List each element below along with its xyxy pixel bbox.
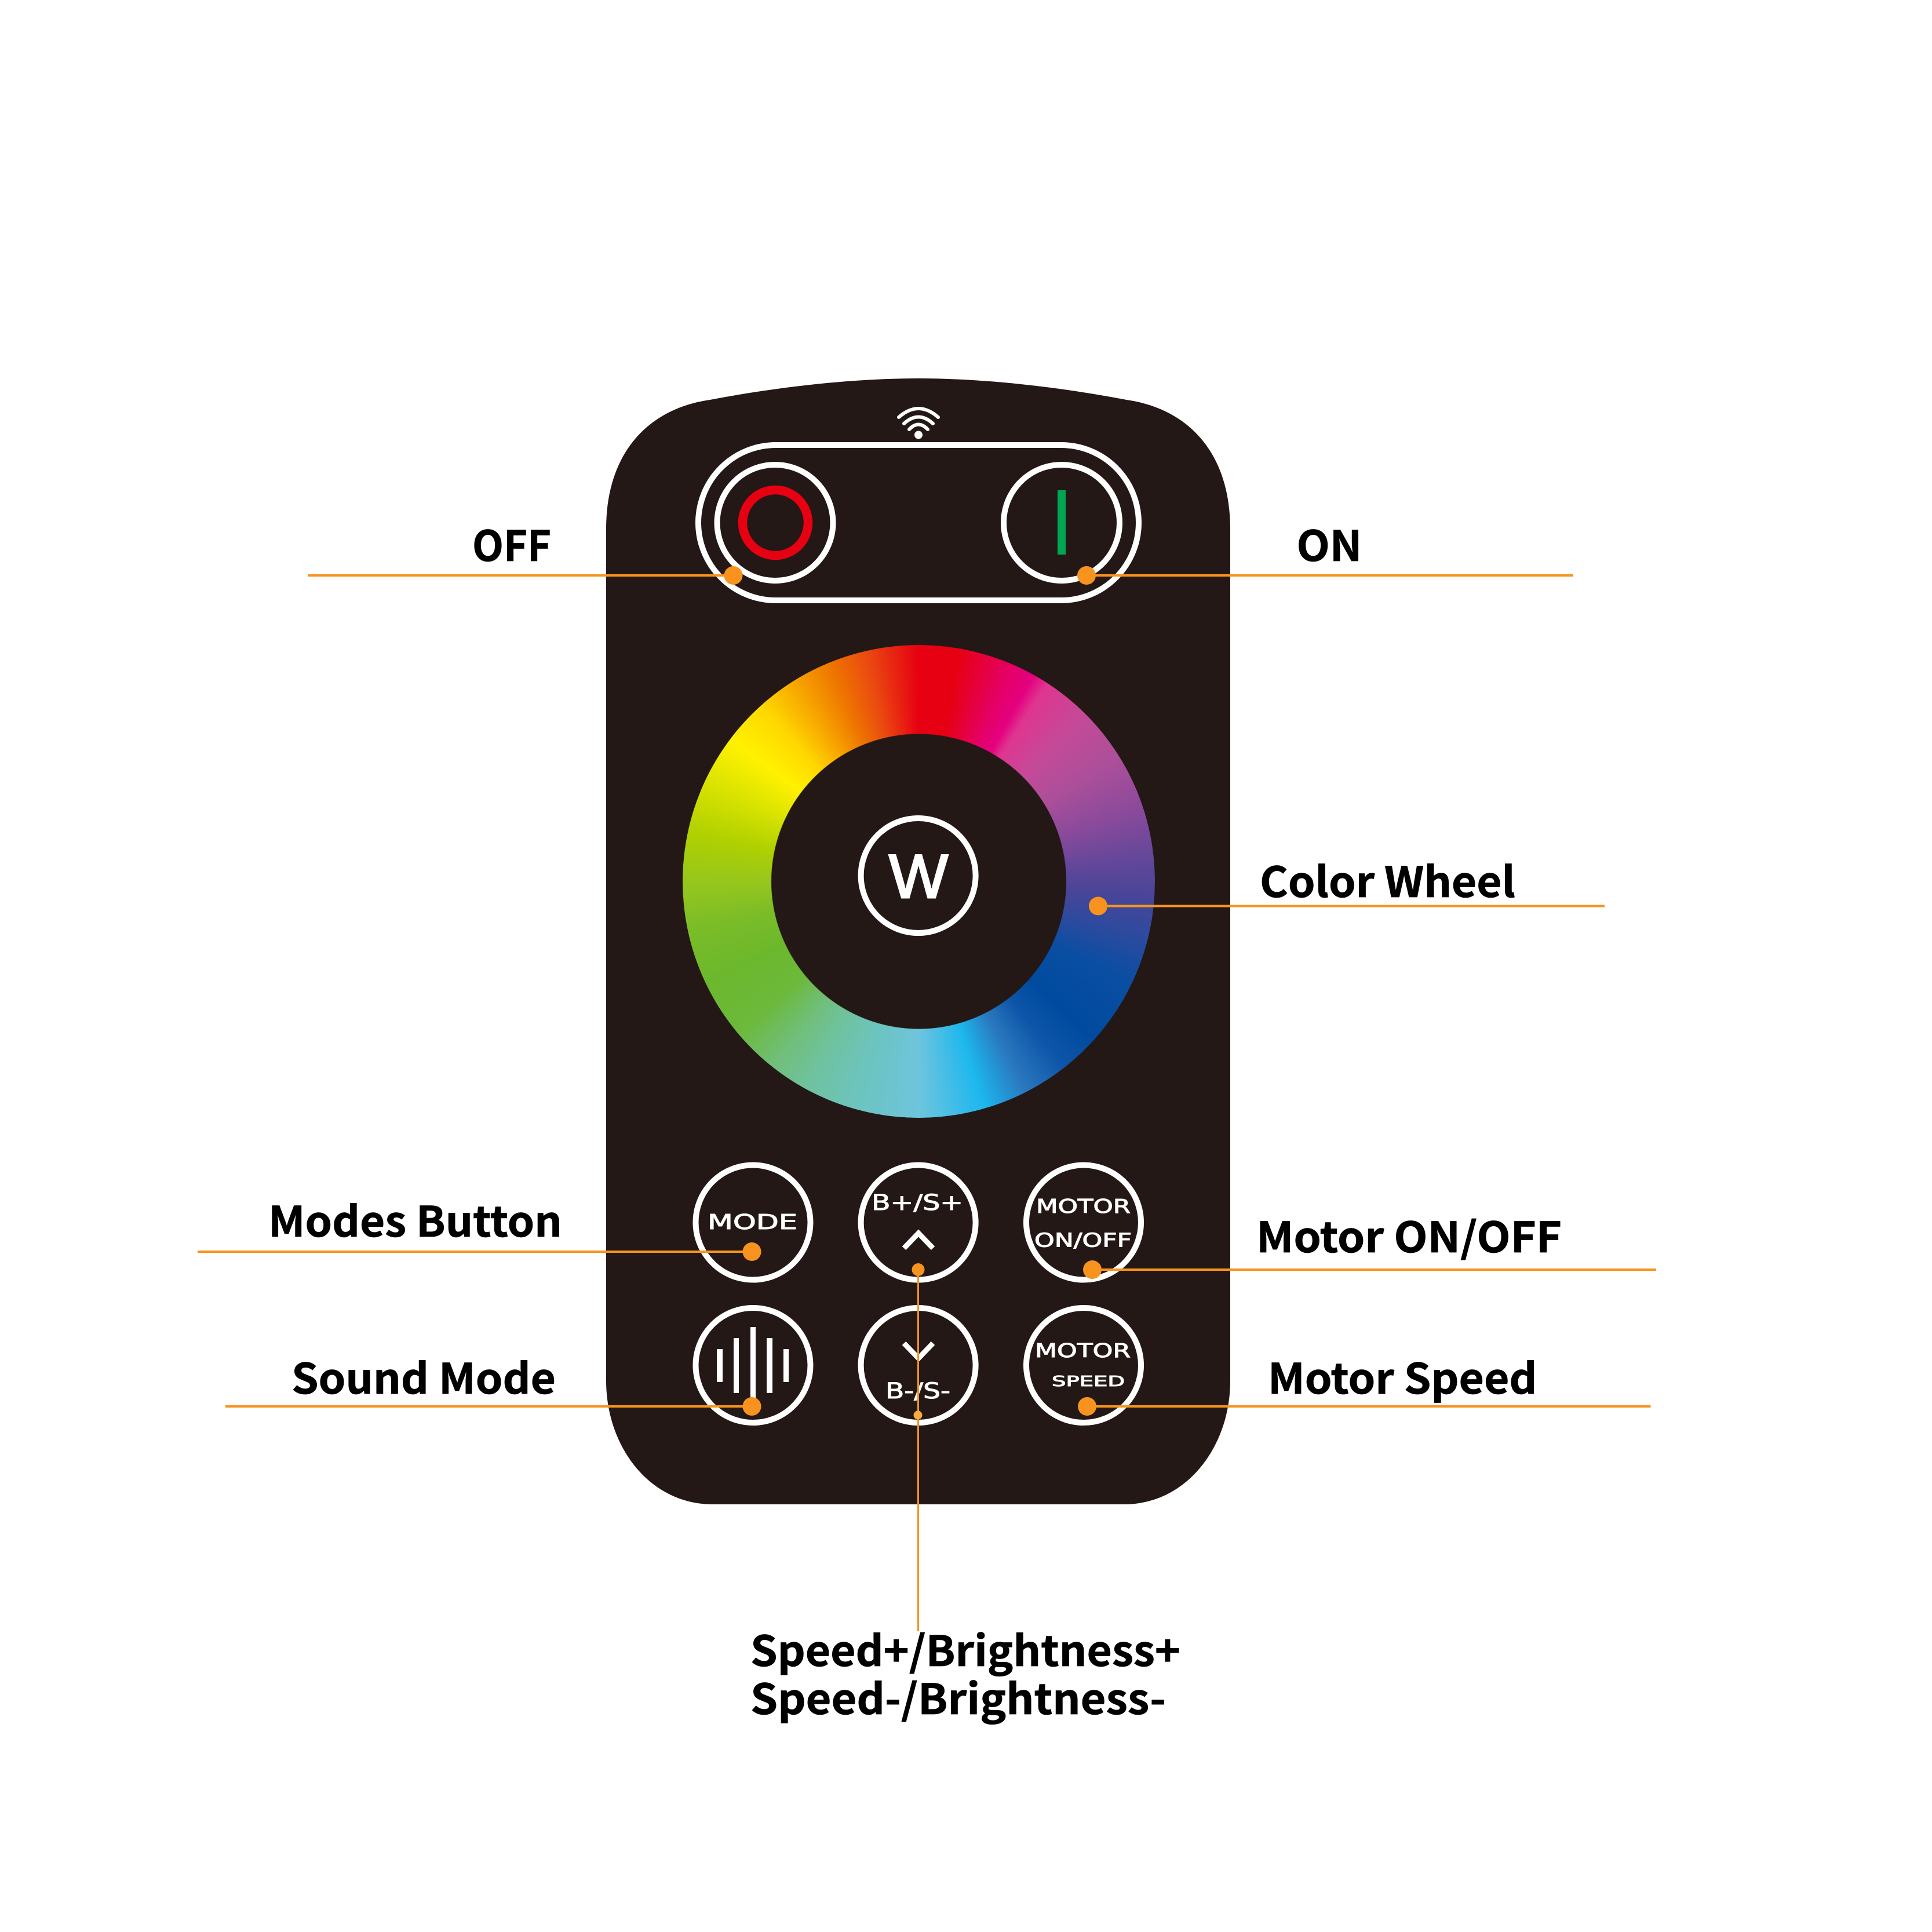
callout: Sound Mode bbox=[225, 1345, 761, 1416]
brightness and speed up button: B+/S+ bbox=[872, 1190, 963, 1215]
brightness and speed down button: B-/S- bbox=[885, 1379, 950, 1404]
MODE button: MODE bbox=[708, 1211, 797, 1234]
ON button bbox=[1004, 465, 1120, 581]
callout: Sound Mode: Sound Mode bbox=[291, 1345, 556, 1406]
icon: wireless signal bbox=[899, 409, 938, 439]
callout: Color Wheel: Color Wheel bbox=[1260, 848, 1515, 909]
remote control device bbox=[606, 378, 1230, 1504]
callout: Modes Button bbox=[198, 1188, 761, 1261]
callout: ON bbox=[1077, 512, 1573, 585]
callout: Color Wheel bbox=[1089, 848, 1605, 916]
callout: Motor Speed bbox=[1078, 1345, 1650, 1416]
motor speed button: SPEED bbox=[1052, 1373, 1125, 1390]
callout: ON: ON bbox=[1297, 512, 1362, 573]
callout: OFF: OFF bbox=[472, 512, 551, 573]
callout: Modes Button: Modes Button bbox=[268, 1188, 562, 1249]
callout: Speed and Brightness bbox=[750, 1263, 1180, 1726]
callout: Motor ON/OFF: Motor ON/OFF bbox=[1256, 1204, 1562, 1264]
power button pill bbox=[698, 445, 1139, 600]
motor on/off button: ON/OFF bbox=[1034, 1229, 1132, 1252]
MODE button bbox=[695, 1165, 810, 1280]
callout: Speed and Brightness: Speed-/Brightness- bbox=[750, 1665, 1166, 1726]
W button bbox=[861, 818, 976, 933]
brightness and speed down button bbox=[861, 1308, 976, 1423]
callout: OFF bbox=[308, 512, 743, 585]
OFF button bbox=[717, 465, 833, 581]
motor on/off button bbox=[1026, 1165, 1141, 1280]
sound mode button bbox=[695, 1308, 810, 1423]
motor on/off button: MOTOR bbox=[1036, 1195, 1131, 1217]
remote body bbox=[606, 378, 1230, 1504]
motor speed button bbox=[1026, 1308, 1141, 1423]
callout: Speed and Brightness: Speed+/Brightness+ bbox=[750, 1617, 1180, 1678]
callout: Motor Speed: Motor Speed bbox=[1268, 1345, 1537, 1406]
color wheel bbox=[683, 645, 1155, 1118]
brightness and speed up button bbox=[861, 1165, 976, 1280]
motor speed button: MOTOR bbox=[1035, 1339, 1131, 1362]
W button: W bbox=[889, 841, 948, 911]
callout: Motor ON/OFF bbox=[1083, 1204, 1656, 1279]
